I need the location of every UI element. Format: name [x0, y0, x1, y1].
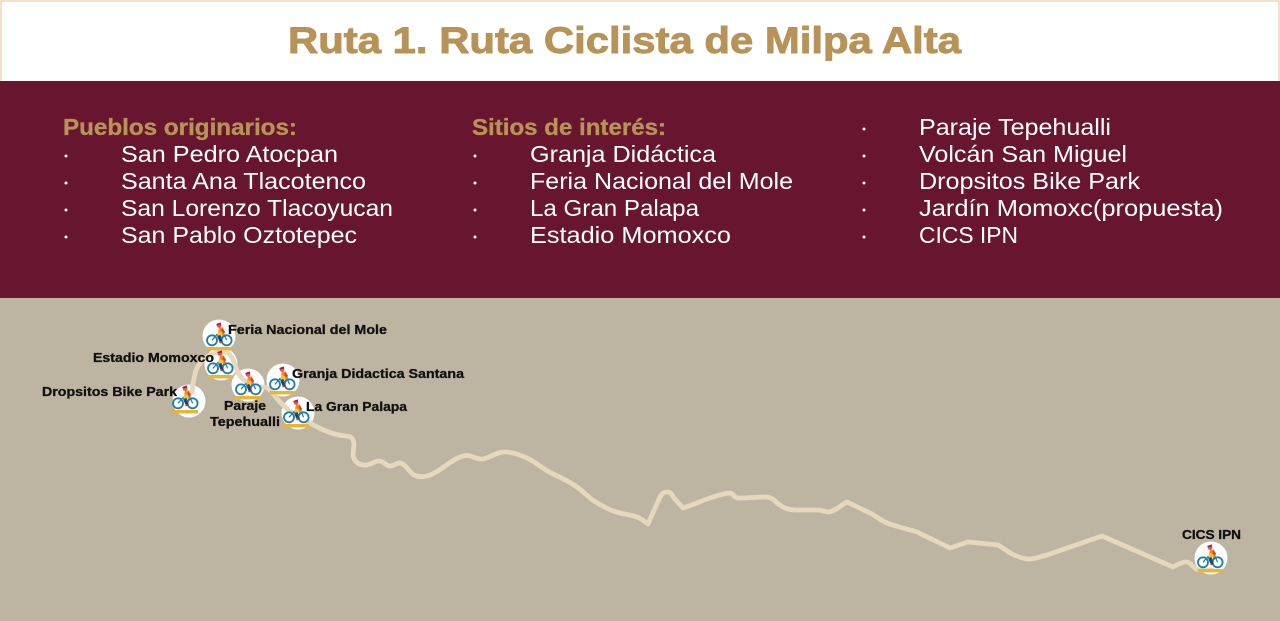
icon: cyclist, Dropsitos Bike Park: [172, 385, 198, 413]
list: sitios de interés: La Gran Palapa: [530, 195, 699, 221]
list: pueblos originarios: Pueblos originarios:: [63, 114, 297, 140]
title: Ruta 1. Ruta Ciclista de Milpa Alta: [288, 20, 961, 61]
panel: route map: [0, 298, 1280, 621]
list: pueblos originarios: San Pablo Oztotepec: [121, 222, 357, 248]
label: Dropsitos Bike Park: Dropsitos Bike Park: [42, 384, 178, 399]
list: sitios de interés, continued: Paraje Tepehualli: [919, 114, 1111, 140]
list: sitios de interés, continued: [862, 114, 1223, 248]
list: sitios de interés: [472, 114, 793, 248]
list: pueblos originarios: Santa Ana Tlacotenco: [121, 168, 366, 194]
list: sitios de interés: Granja Didáctica: [530, 141, 716, 167]
list: sitios de interés, continued: Dropsitos Bike Park: [919, 168, 1141, 194]
list: sitios de interés, continued: Volcán San Miguel: [919, 141, 1127, 167]
label: Paraje Tepehualli: Paraje: [224, 398, 266, 413]
marker discs: [172, 320, 1228, 574]
list: pueblos originarios: [63, 114, 393, 248]
label: Granja Didactica Santana: Granja Didactica Santana: [292, 366, 465, 381]
label: CICS IPN: CICS IPN: [1182, 527, 1241, 542]
icon: cyclist, Feria Nacional del Mole: [206, 322, 232, 350]
label: Paraje Tepehualli: [210, 398, 280, 429]
icon: cyclist, Granja Didactica Santana: [270, 366, 295, 394]
icon: cyclist, CICS IPN: [1198, 544, 1223, 572]
list: sitios de interés: Feria Nacional del Mole: [530, 168, 793, 194]
list: sitios de interés, continued: Jardín Momoxc(propuesta): [919, 195, 1223, 221]
list: sitios de interés, continued: CICS IPN: [919, 222, 1018, 248]
panel: lists: [0, 81, 1280, 298]
list: pueblos originarios: San Lorenzo Tlacoyucan: [121, 195, 393, 221]
list: pueblos originarios: San Pedro Atocpan: [121, 141, 338, 167]
list: sitios de interés: Estadio Momoxco: [530, 222, 731, 248]
label: Estadio Momoxco: Estadio Momoxco: [93, 350, 214, 365]
icon: cyclist, Paraje Tepehualli: [236, 371, 261, 399]
header band: [0, 0, 1280, 81]
label: La Gran Palapa: La Gran Palapa: [306, 399, 408, 414]
route line: [192, 352, 1212, 570]
label: Feria Nacional del Mole: Feria Nacional del Mole: [228, 322, 387, 337]
icon: cyclist, Estadio Momoxco: [208, 350, 233, 378]
icon: cyclist, La Gran Palapa: [284, 399, 309, 427]
label: Paraje Tepehualli: Tepehualli: [210, 414, 280, 429]
list: sitios de interés: Sitios de interés:: [472, 114, 666, 140]
